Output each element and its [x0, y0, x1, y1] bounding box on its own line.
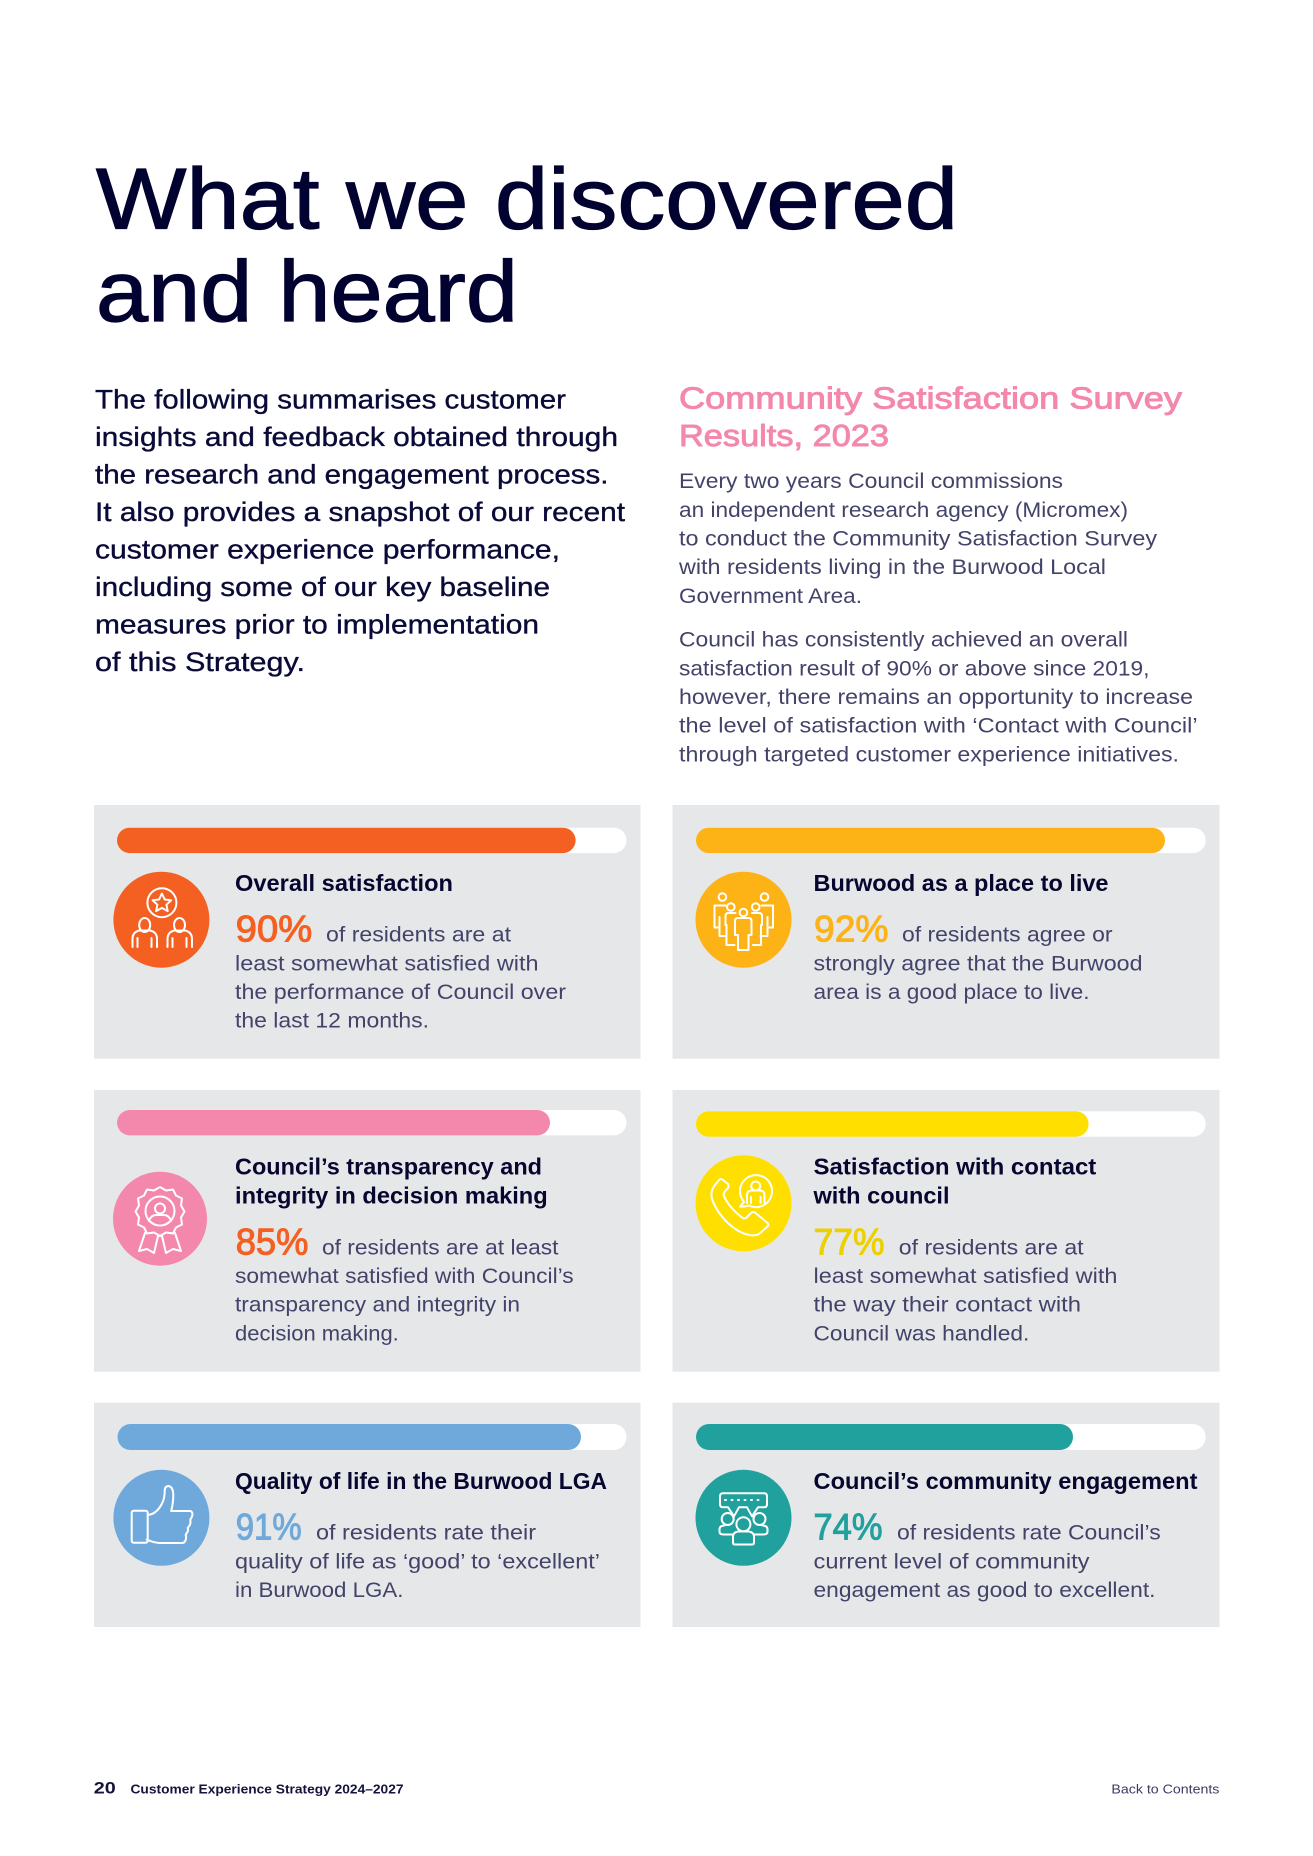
panel: satisfaction with contact	[672, 1090, 1220, 1372]
card description: quality of life as ‘good’ to ‘excellent’	[235, 1549, 600, 1573]
card description: transparency and integrity in	[235, 1293, 520, 1317]
progress bar: 74%	[696, 1424, 1206, 1450]
survey paragraph 2: the level of satisfaction with ‘Contact with Council’	[679, 714, 1198, 738]
card description: in Burwood LGA.	[235, 1578, 403, 1602]
card heading	[812, 1153, 1096, 1208]
card description: current level of community	[814, 1549, 1090, 1573]
card description	[235, 923, 566, 1033]
card description: of residents rate Council’s	[897, 1520, 1161, 1544]
intro text block: customer experience performance,	[95, 534, 560, 564]
panel: Burwood as a place to live	[672, 805, 1220, 1059]
title: and heard	[96, 244, 518, 340]
survey paragraph 1: Every two years Council commissions	[679, 469, 1063, 493]
icon: phone and speech bubble	[696, 1155, 792, 1251]
statistic: 92%: 92%	[814, 908, 888, 950]
intro text block: It also provides a snapshot of our recent	[95, 497, 626, 527]
card description: Council was handled.	[814, 1321, 1029, 1345]
statistic: 74%: 74%	[814, 1505, 882, 1547]
statistic: 90%: 90%	[236, 908, 312, 950]
statistic: 77%: 77%	[814, 1220, 884, 1262]
card heading: Burwood as a place to live	[814, 870, 1108, 896]
card description: the performance of Council over	[235, 980, 566, 1004]
intro text block: including some of our key baseline	[95, 572, 550, 602]
card heading: integrity in decision making	[235, 1182, 548, 1208]
survey paragraph 2: satisfaction result of 90% or above since 2019,	[679, 656, 1150, 680]
survey paragraph 1: Government Area.	[679, 584, 862, 608]
card description	[814, 1520, 1161, 1602]
progress bar: 77%	[696, 1111, 1206, 1137]
icon: thumbs up	[113, 1470, 209, 1566]
progress bar: 90%	[117, 828, 626, 853]
panel: transparency and integrity	[94, 1090, 640, 1372]
card description: of residents are at least	[322, 1235, 559, 1259]
card heading: Quality of life in the Burwood LGA	[235, 1468, 607, 1494]
card description: strongly agree that the Burwood	[814, 951, 1142, 975]
footer: document title: Customer Experience Strategy 2024–2027	[130, 1782, 404, 1796]
intro text block: the research and engagement process.	[95, 459, 608, 489]
card heading: Council’s community engagement	[814, 1468, 1198, 1494]
card description: of residents agree or	[902, 923, 1112, 947]
card heading: with council	[812, 1182, 950, 1208]
card heading: Council’s transparency and	[235, 1153, 542, 1179]
title	[96, 151, 958, 340]
card description: of residents are at	[326, 923, 511, 947]
card description: the last 12 months.	[235, 1009, 429, 1033]
intro text block: of this Strategy.	[95, 647, 305, 677]
statistic: 91%: 91%	[236, 1505, 302, 1547]
survey paragraph 2	[679, 628, 1198, 766]
survey paragraph 2: through targeted customer experience initiatives.	[679, 742, 1179, 766]
survey heading	[679, 380, 1183, 453]
intro text block: insights and feedback obtained through	[95, 422, 618, 452]
survey paragraph 1: to conduct the Community Satisfaction Survey	[679, 526, 1157, 550]
icon: award rosette	[113, 1172, 207, 1266]
survey heading: Results, 2023	[679, 418, 889, 453]
intro text block: The following summarises customer	[95, 384, 566, 414]
icon: people with star badge	[113, 872, 209, 968]
card heading: Satisfaction with contact	[814, 1153, 1096, 1179]
footer: page number: 20	[94, 1778, 116, 1798]
intro text block	[95, 384, 626, 677]
card description: area is a good place to live.	[814, 980, 1090, 1004]
card heading	[235, 1153, 548, 1208]
progress bar: 91%	[118, 1424, 626, 1450]
statistic: 85%: 85%	[236, 1220, 308, 1262]
card description: engagement as good to excellent.	[814, 1578, 1156, 1602]
survey heading: Community Satisfaction Survey	[679, 380, 1183, 415]
survey paragraph 2: however, there remains an opportunity to increase	[679, 685, 1193, 709]
icon: family group	[696, 872, 792, 968]
panel: quality of life	[94, 1403, 640, 1627]
card description	[235, 1235, 574, 1345]
progress bar: 92%	[696, 828, 1206, 853]
title: What we discovered	[96, 151, 958, 247]
progress bar: 85%	[117, 1110, 626, 1135]
footer: back to contents link: Back to Contents	[1111, 1782, 1220, 1796]
card description	[814, 1235, 1117, 1345]
card description	[814, 923, 1142, 1004]
card description: of residents are at	[899, 1235, 1084, 1259]
card description: somewhat satisfied with Council’s	[235, 1264, 574, 1288]
survey paragraph 1	[678, 469, 1157, 608]
survey paragraph 2: Council has consistently achieved an overall	[679, 628, 1128, 652]
intro text block: measures prior to implementation	[95, 610, 539, 640]
card heading: Overall satisfaction	[235, 870, 453, 896]
panel: overall satisfaction	[94, 805, 640, 1059]
panel: community engagement	[672, 1403, 1220, 1627]
icon: community group with banner	[696, 1470, 792, 1566]
card description: of residents rate their	[316, 1520, 536, 1544]
card description: the way their contact with	[814, 1293, 1081, 1317]
card description: least somewhat satisfied with	[235, 951, 538, 975]
survey paragraph 1: with residents living in the Burwood Local	[678, 555, 1106, 579]
card description: least somewhat satisfied with	[814, 1264, 1117, 1288]
survey paragraph 1: an independent research agency (Micromex)	[679, 498, 1128, 522]
card description: decision making.	[235, 1321, 399, 1345]
card description	[235, 1520, 600, 1602]
